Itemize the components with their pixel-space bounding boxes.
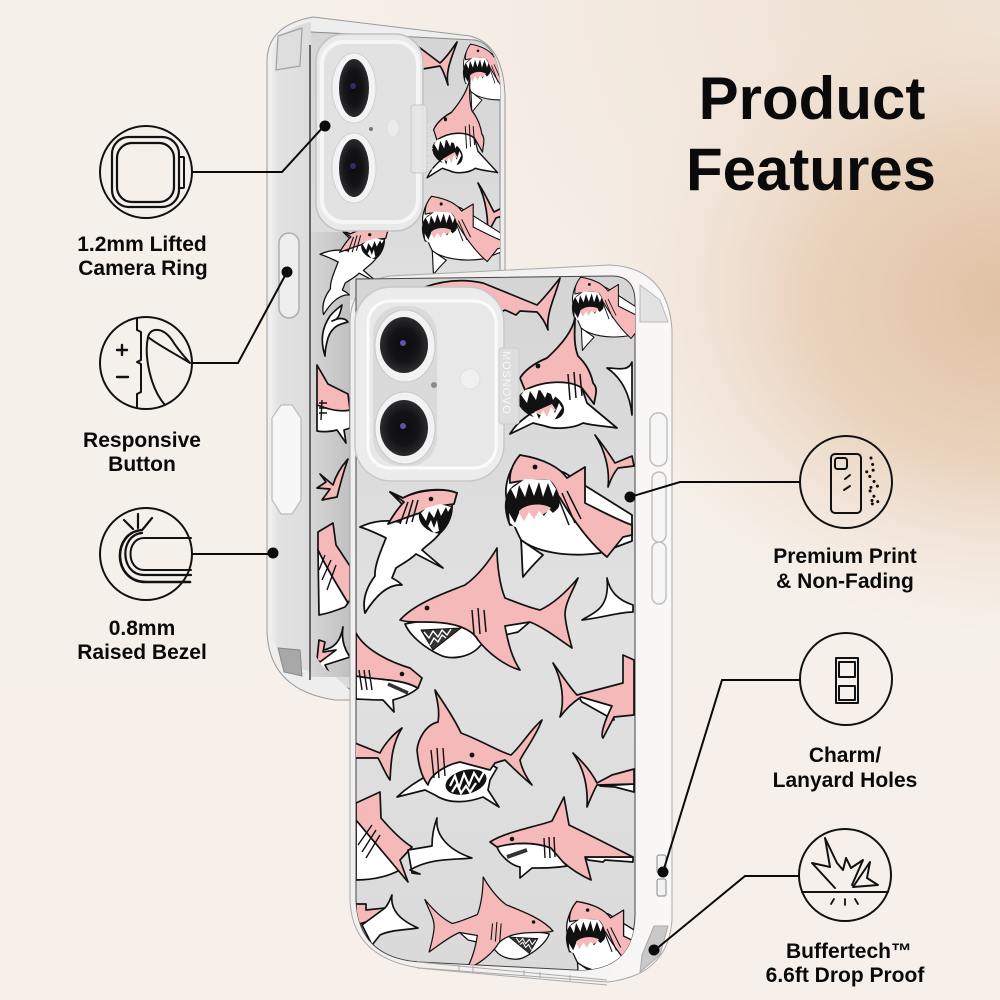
white tail bbox=[582, 578, 633, 620]
tail right bbox=[573, 753, 634, 807]
anchor dot bbox=[658, 866, 668, 878]
side button: lower bbox=[272, 405, 301, 514]
shark: right tail pink bbox=[553, 655, 634, 738]
label: Premium Print bbox=[773, 545, 917, 568]
shark: pink head-on bbox=[510, 318, 617, 434]
right side button: lower bbox=[652, 472, 666, 604]
pink tail bbox=[595, 435, 634, 487]
anchor dot bbox=[268, 548, 278, 558]
label bbox=[77, 233, 208, 280]
front phone sharks bbox=[356, 276, 635, 970]
leader line bbox=[192, 125, 325, 172]
label: Raised Bezel bbox=[77, 641, 207, 664]
shark: right-facing bbox=[425, 877, 553, 968]
shark: left cut bbox=[356, 633, 422, 712]
shark strip bbox=[418, 41, 458, 86]
icon: button bbox=[100, 317, 192, 409]
front camera island: MOSNOVO bbox=[500, 351, 512, 415]
front phone case bbox=[350, 265, 672, 989]
label: Button bbox=[108, 453, 176, 476]
white tail bbox=[607, 362, 632, 415]
shark: mid bbox=[427, 78, 498, 178]
label: Responsive bbox=[83, 429, 201, 452]
label: Buffertech™ bbox=[786, 940, 912, 963]
callout: camera ring bbox=[77, 120, 330, 280]
shark: top right bbox=[462, 44, 500, 112]
label bbox=[766, 940, 925, 987]
callout: button bbox=[83, 266, 292, 476]
leader line bbox=[192, 272, 287, 363]
icon: impact bbox=[799, 829, 891, 921]
icon: camera ring bbox=[100, 126, 192, 218]
tail piece bbox=[317, 459, 348, 500]
callout: drop proof bbox=[648, 829, 925, 987]
front camera island bbox=[355, 287, 519, 481]
anchor dot bbox=[320, 120, 330, 132]
label: Lanyard Holes bbox=[773, 769, 917, 792]
bottom edge segments bbox=[417, 962, 607, 985]
callout: print bbox=[624, 436, 917, 593]
callout: bezel bbox=[77, 508, 278, 664]
back phone case bbox=[267, 17, 526, 700]
icon: print bbox=[800, 436, 892, 528]
back phone sharks bbox=[315, 29, 526, 690]
shark: centre bbox=[400, 548, 578, 670]
shark: pink with big fin bbox=[397, 690, 542, 807]
top corner clips bbox=[276, 28, 302, 70]
label: 1.2mm Lifted bbox=[77, 233, 207, 256]
anchor dot bbox=[282, 266, 292, 278]
bumper corner detail bbox=[640, 926, 668, 972]
label bbox=[773, 744, 917, 792]
shark: open mouth bbox=[422, 196, 503, 274]
label: Camera Ring bbox=[78, 257, 208, 280]
side button: upper bbox=[279, 233, 299, 318]
right side button: upper bbox=[650, 413, 667, 466]
shark: bottom right bbox=[566, 900, 634, 970]
leader line bbox=[655, 876, 800, 950]
label bbox=[773, 545, 917, 593]
back camera island bbox=[316, 34, 435, 231]
shark: white bbox=[320, 228, 388, 314]
lanyard holes bbox=[657, 855, 666, 896]
shark strip top bbox=[425, 278, 560, 330]
label: Charm/ bbox=[809, 744, 881, 767]
shark: side bbox=[490, 797, 633, 880]
white tail bottom left bbox=[356, 895, 418, 945]
shark: lower strip bbox=[318, 523, 350, 615]
tail left bbox=[355, 728, 402, 780]
top corner detail bbox=[640, 285, 668, 322]
bottom corner clips bbox=[278, 648, 302, 676]
anchor dot bbox=[648, 944, 660, 956]
shark: top right bbox=[572, 276, 635, 351]
icon: bezel bbox=[100, 508, 192, 600]
white tail bbox=[322, 305, 348, 356]
icon: holes bbox=[800, 633, 892, 725]
white tail lower left bbox=[408, 818, 472, 874]
shark: strip pink bbox=[317, 365, 350, 443]
label: 6.6ft Drop Proof bbox=[766, 964, 925, 987]
shark: lower left bbox=[356, 792, 412, 882]
leader line bbox=[663, 680, 800, 872]
shark: big open mouth bbox=[506, 455, 632, 577]
title: Features bbox=[686, 136, 936, 203]
label bbox=[83, 429, 201, 476]
title: Product bbox=[699, 65, 925, 132]
label: & Non-Fading bbox=[776, 570, 914, 593]
shark: white bbox=[360, 490, 457, 613]
back camera island: MOSNOVO bbox=[426, 123, 435, 170]
label bbox=[77, 617, 207, 664]
label: 0.8mm bbox=[109, 617, 175, 640]
tail and white fin bbox=[315, 627, 350, 690]
callout: charm holes bbox=[658, 633, 917, 878]
tail bbox=[477, 182, 500, 227]
leader line bbox=[192, 553, 273, 555]
leader line bbox=[630, 482, 800, 497]
anchor dot bbox=[624, 492, 636, 502]
title bbox=[686, 65, 936, 203]
